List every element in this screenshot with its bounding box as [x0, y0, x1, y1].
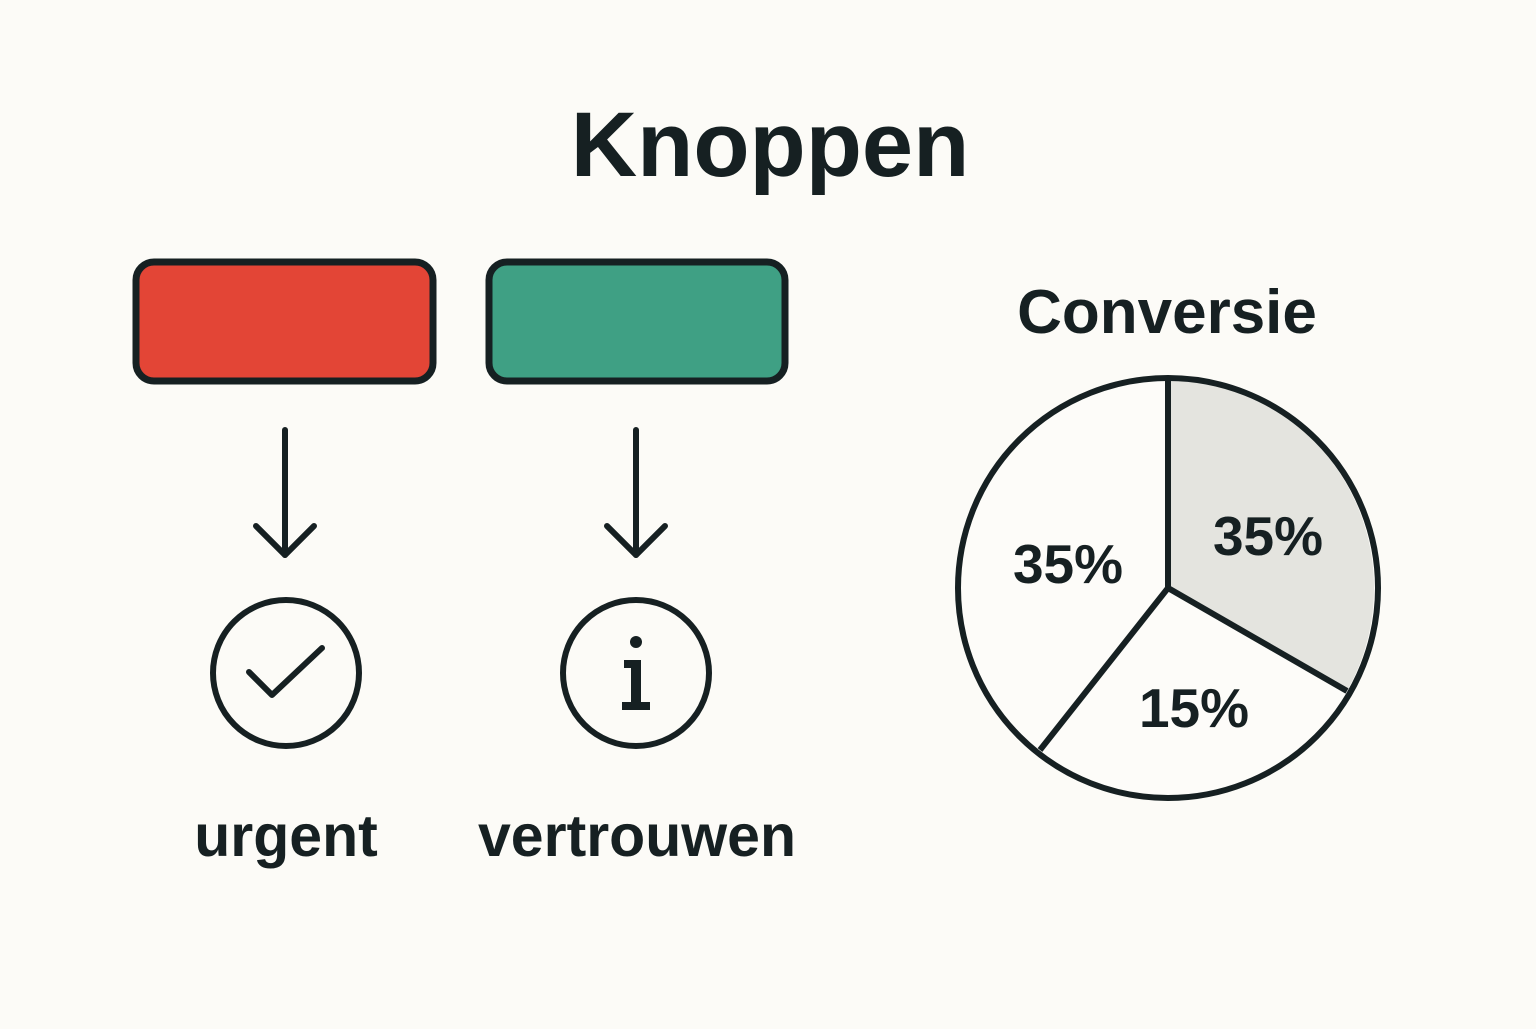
button: red: [136, 262, 433, 381]
heading: Conversie: Conversie: [1017, 278, 1317, 347]
icon: check circle: [213, 600, 359, 746]
pie chart: 15%: [1139, 677, 1249, 739]
pie chart: 35%: [1213, 505, 1323, 567]
title: Knoppen: [571, 94, 969, 196]
arrow: red to urgent: [256, 430, 314, 555]
icon: info circle: [563, 600, 709, 746]
pie chart: [958, 378, 1378, 798]
label: vertrouwen: vertrouwen: [478, 803, 796, 869]
label: urgent: urgent: [194, 803, 378, 869]
button: green: [489, 262, 785, 381]
pie chart: 35%: [1013, 533, 1123, 595]
arrow: green to vertrouwen: [607, 430, 665, 555]
